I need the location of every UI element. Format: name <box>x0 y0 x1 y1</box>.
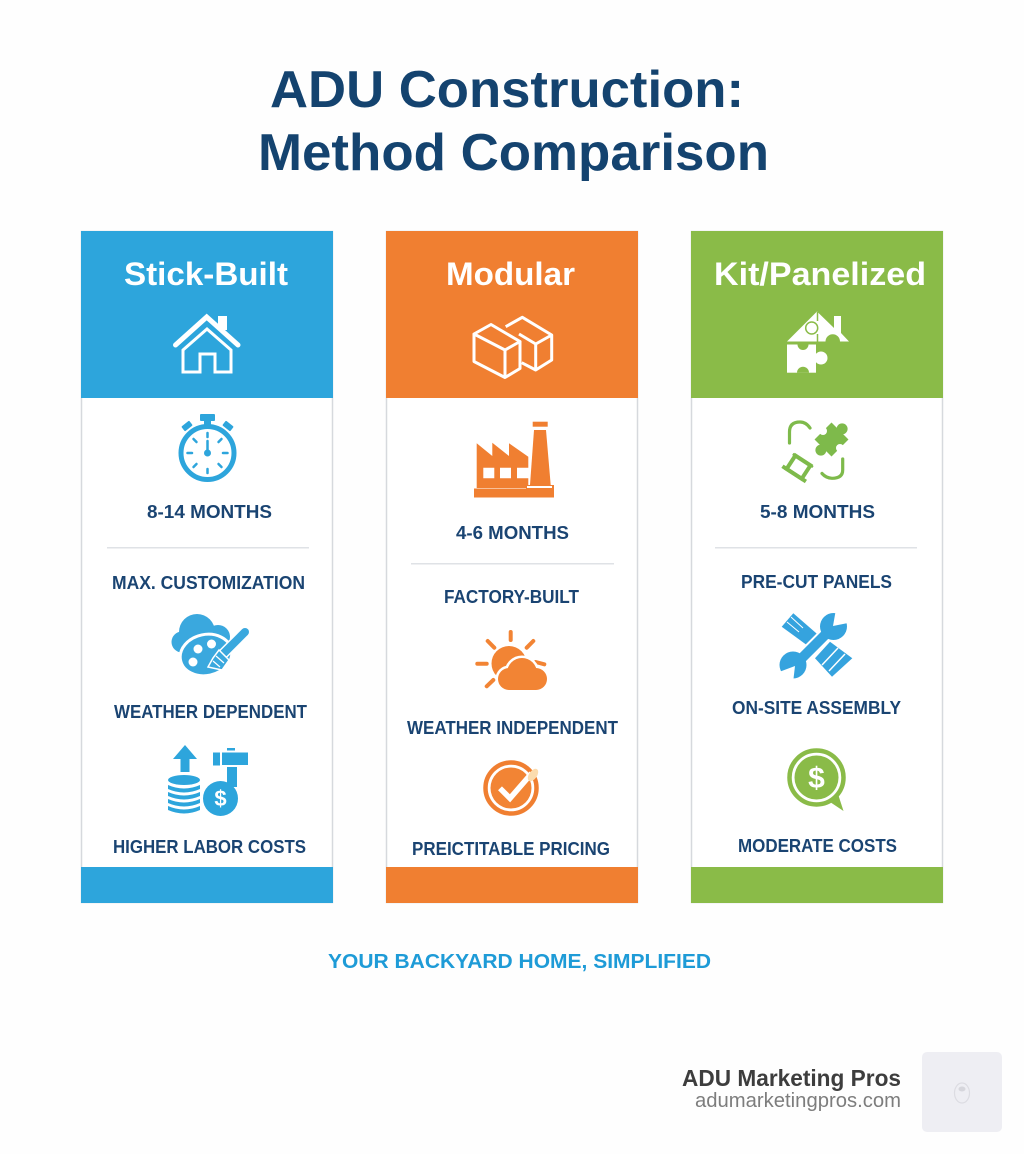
panel header: modular <box>386 231 638 398</box>
label: on-site assembly: ON-SITE ASSEMBLY <box>732 698 901 718</box>
panel: kit/panelized <box>691 231 943 903</box>
icon: factory <box>474 422 554 498</box>
icon: sun and cloud <box>477 632 547 690</box>
icon: modular boxes <box>474 317 552 378</box>
brand text <box>682 1065 901 1112</box>
tagline: YOUR BACKYARD HOME, SIMPLIFIED <box>328 951 711 973</box>
label: predictable pricing: PREICTITABLE PRICING <box>412 839 610 859</box>
label: pre-cut panels: PRE-CUT PANELS <box>741 572 892 592</box>
heading: stick-built: Stick-Built <box>124 256 288 292</box>
icon: scattered kit pieces <box>782 414 857 481</box>
icon: house <box>176 316 238 372</box>
panel footer bar: stick-built <box>81 867 333 903</box>
icon: puzzle house <box>787 312 849 373</box>
panel header: kit/panelized <box>691 231 943 398</box>
panel: stick-built <box>81 231 333 903</box>
panel: modular <box>386 231 638 903</box>
panel footer bar: kit/panelized <box>691 867 943 903</box>
label: 4-6 months: 4-6 MONTHS <box>456 523 569 543</box>
label: weather independent: WEATHER INDEPENDENT <box>407 718 618 738</box>
icon: stopwatch <box>181 414 234 480</box>
label: 8-14 months: 8-14 MONTHS <box>147 502 272 522</box>
heading: modular: Modular <box>446 256 575 292</box>
panel footer bar: modular <box>386 867 638 903</box>
title: Method Comparison <box>258 124 769 182</box>
title <box>258 61 769 182</box>
icon: wrench and panels <box>779 609 853 683</box>
icon: cloud and palette <box>172 614 245 680</box>
brand text: ADU Marketing Pros <box>682 1065 901 1091</box>
icon: dollar bubble <box>790 750 844 811</box>
label: weather dependent: WEATHER DEPENDENT <box>114 702 307 722</box>
logo placeholder <box>922 1052 1002 1132</box>
icon: check badge <box>486 762 540 814</box>
label: higher labor costs: HIGHER LABOR COSTS <box>113 837 306 857</box>
panel header: stick-built <box>81 231 333 398</box>
icon: rising labor costs: $ <box>214 786 227 811</box>
label: max customization: MAX. CUSTOMIZATION <box>112 573 305 593</box>
label: factory-built: FACTORY-BUILT <box>444 587 579 607</box>
brand text: adumarketingpros.com <box>695 1090 901 1112</box>
label: 5-8 months: 5-8 MONTHS <box>760 502 875 522</box>
icon: rising labor costs <box>168 745 248 816</box>
heading: kit/panelized: Kit/Panelized <box>714 256 926 292</box>
title: ADU Construction: <box>270 61 744 119</box>
icon: dollar bubble: $ <box>808 762 825 795</box>
label: moderate costs: MODERATE COSTS <box>738 836 897 856</box>
